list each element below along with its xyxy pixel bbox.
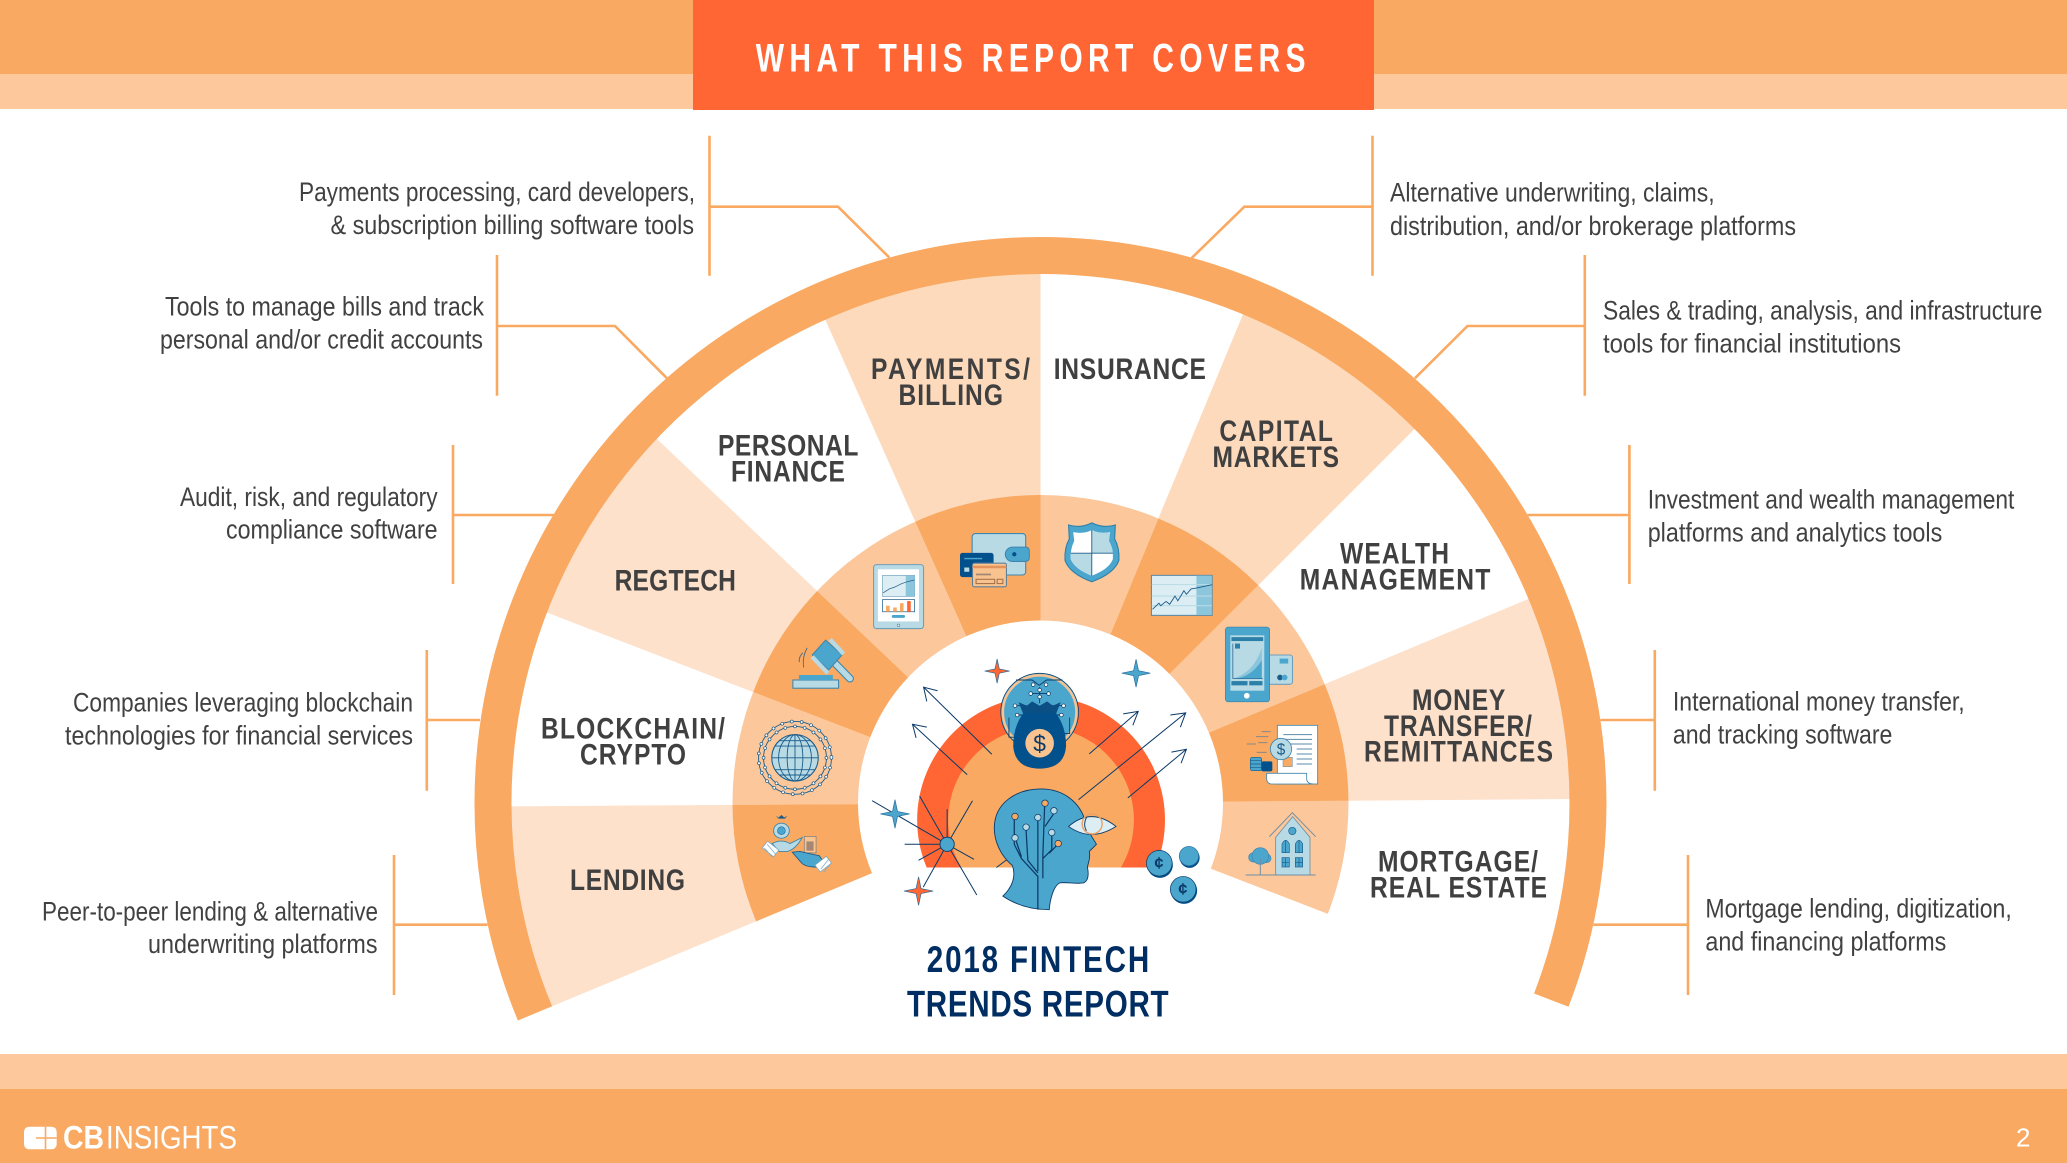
- central white disc: [858, 620, 1223, 986]
- description: personal finance: [160, 292, 484, 355]
- description: payments: & subscription billing software tools: [330, 210, 694, 240]
- icon: remittance document: $: [1277, 742, 1286, 759]
- icon: remittance document: [1247, 725, 1318, 784]
- coins: ¢: [1178, 881, 1187, 899]
- label: capital markets: [1212, 413, 1339, 473]
- label: money transfer/remittances: [1364, 683, 1553, 768]
- label: capital markets: MARKETS: [1212, 439, 1339, 473]
- description: wealth management: platforms and analytics tools: [1648, 517, 1942, 547]
- top band: [0, 0, 2067, 109]
- description: money transfer: and tracking software: [1673, 719, 1892, 749]
- money bag in circuit halo: [1001, 673, 1079, 769]
- description: lending: [42, 897, 378, 959]
- label: blockchain/crypto: [541, 711, 725, 771]
- label: blockchain/crypto: CRYPTO: [580, 737, 686, 771]
- description: wealth management: [1648, 484, 2015, 547]
- outer arc ring: [493, 256, 1588, 1013]
- description: mortgage: [1705, 894, 2012, 957]
- label: wealth management: WEALTH: [1340, 536, 1449, 570]
- head with circuit brain and eye: [994, 789, 1116, 910]
- label: payments/billing: PAYMENTS/: [871, 351, 1030, 385]
- footer band: [0, 1054, 2067, 1163]
- title banner: [693, 0, 1374, 110]
- label: money transfer/remittances: MONEY: [1412, 683, 1505, 716]
- label: payments/billing: [871, 351, 1030, 411]
- description: capital markets: [1603, 295, 2042, 358]
- label: wealth management: MANAGEMENT: [1300, 562, 1491, 596]
- label: personal finance: PERSONAL: [718, 428, 858, 462]
- description: payments: [299, 177, 695, 240]
- label: mortgage/real estate: MORTGAGE/: [1378, 844, 1538, 878]
- arrows: [912, 687, 1186, 867]
- center report title: [907, 940, 1169, 1025]
- CB Insights logo: CB: [63, 1119, 104, 1155]
- description: lending: Peer-to-peer lending & alternative: [42, 897, 378, 927]
- CB Insights logo: INSIGHTS: [106, 1119, 237, 1155]
- description: mortgage: Mortgage lending, digitization,: [1705, 894, 2012, 924]
- icon: tablet: [874, 565, 924, 629]
- coins: [1146, 846, 1200, 904]
- label: capital markets: CAPITAL: [1219, 413, 1333, 447]
- description: insurance: distribution, and/or brokerage platforms: [1390, 211, 1796, 241]
- label: mortgage/real estate: REAL ESTATE: [1370, 870, 1547, 904]
- icon: stock chart: [1151, 575, 1212, 615]
- icon: house and tree: [1246, 813, 1316, 875]
- description: regtech: [180, 482, 438, 545]
- description: insurance: [1390, 178, 1796, 241]
- description: blockchain: technologies for financial services: [65, 721, 413, 751]
- description: mortgage: and financing platforms: [1705, 927, 1946, 957]
- center report title: 2018 FINTECH: [927, 940, 1149, 981]
- center report title: TRENDS REPORT: [907, 984, 1169, 1025]
- label: blockchain/crypto: BLOCKCHAIN/: [541, 711, 725, 745]
- center illustration: [872, 658, 1200, 910]
- icon: gavel: [793, 639, 850, 688]
- coins: ¢: [1154, 855, 1163, 873]
- description: regtech: Audit, risk, and regulatory: [180, 482, 438, 512]
- concentric half circles: [917, 702, 1165, 868]
- connector lines: [394, 136, 1688, 995]
- outer sectors: [512, 274, 1570, 1008]
- description: blockchain: [65, 688, 413, 751]
- label: money transfer/remittances: REMITTANCES: [1364, 734, 1553, 768]
- starburst: [872, 796, 977, 895]
- label: personal finance: FINANCE: [731, 454, 845, 488]
- sparkle stars: [880, 659, 1150, 905]
- description: regtech: compliance software: [226, 515, 438, 545]
- CB Insights logo: [24, 1119, 237, 1155]
- label: regtech: REGTECH: [615, 563, 736, 597]
- page number: 2: [2016, 1123, 2030, 1153]
- icon: phone and card: [1225, 627, 1292, 702]
- icons at ring right edge: [1246, 725, 1318, 875]
- inner icon ring sectors: [732, 495, 1348, 922]
- icon: lending hands: [762, 815, 832, 872]
- icon layer: [759, 523, 1292, 872]
- description: insurance: Alternative underwriting, claims,: [1390, 178, 1715, 208]
- label: wealth management: [1300, 536, 1491, 596]
- description: blockchain: Companies leveraging blockchain: [73, 688, 413, 718]
- description: lending: underwriting platforms: [148, 929, 378, 959]
- description: personal finance: personal and/or credit accounts: [160, 325, 483, 355]
- description: personal finance: Tools to manage bills and track: [165, 292, 484, 322]
- label: money transfer/remittances: TRANSFER/: [1384, 709, 1532, 742]
- icon: wallet: [960, 534, 1029, 587]
- description: money transfer: [1673, 687, 1965, 749]
- label: personal finance: [718, 428, 858, 488]
- label: payments/billing: BILLING: [898, 377, 1003, 411]
- label: insurance: INSURANCE: [1054, 351, 1206, 385]
- description: money transfer: International money transfer,: [1673, 687, 1965, 717]
- description: payments: Payments processing, card developers,: [299, 177, 695, 207]
- title banner: WHAT THIS REPORT COVERS: [756, 37, 1306, 81]
- money bag in circuit halo: $: [1033, 730, 1046, 756]
- label: lending: LENDING: [570, 863, 685, 897]
- icon: blockchain globe: [759, 721, 831, 794]
- description: capital markets: tools for financial institutions: [1603, 328, 1901, 358]
- label: mortgage/real estate: [1370, 844, 1547, 904]
- icon: shield: [1065, 523, 1119, 582]
